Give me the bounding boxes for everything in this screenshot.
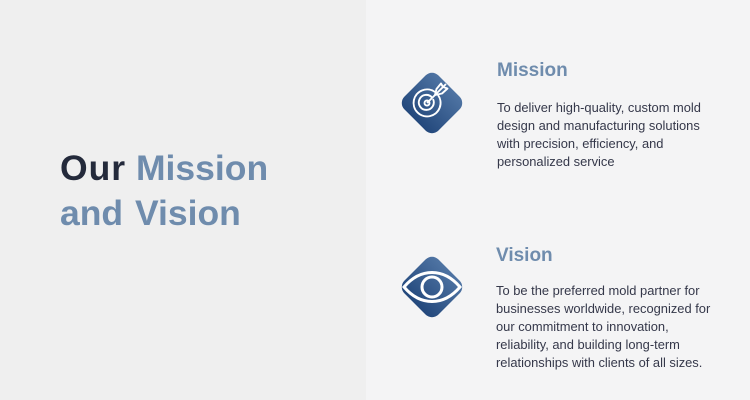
icon: eye bbox=[402, 256, 462, 318]
icon: target with arrow bbox=[402, 72, 462, 134]
heading: mission: Mission bbox=[497, 60, 568, 81]
text: mission statement: To deliver high-quality, custom mold bbox=[497, 100, 701, 115]
text: mission statement: design and manufacturing solutions bbox=[497, 118, 700, 133]
text: vision statement: reliability, and building long-term bbox=[496, 337, 680, 352]
text: vision statement: To be the preferred mold partner for bbox=[496, 283, 700, 298]
text: mission statement: with precision, efficiency, and bbox=[497, 136, 663, 151]
text: vision statement: our commitment to innovation, bbox=[496, 319, 669, 334]
title bbox=[60, 148, 268, 233]
text: vision statement bbox=[496, 283, 710, 370]
left panel bbox=[0, 0, 366, 400]
heading: vision: Vision bbox=[496, 245, 553, 266]
text: mission statement bbox=[497, 100, 701, 169]
text: vision statement: relationships with clients of all sizes. bbox=[496, 355, 702, 370]
text: mission statement: personalized service bbox=[497, 154, 615, 169]
text: vision statement: businesses worldwide, recognized for bbox=[496, 301, 710, 316]
title: and Vision bbox=[60, 193, 241, 233]
title: Our Mission bbox=[60, 148, 268, 188]
